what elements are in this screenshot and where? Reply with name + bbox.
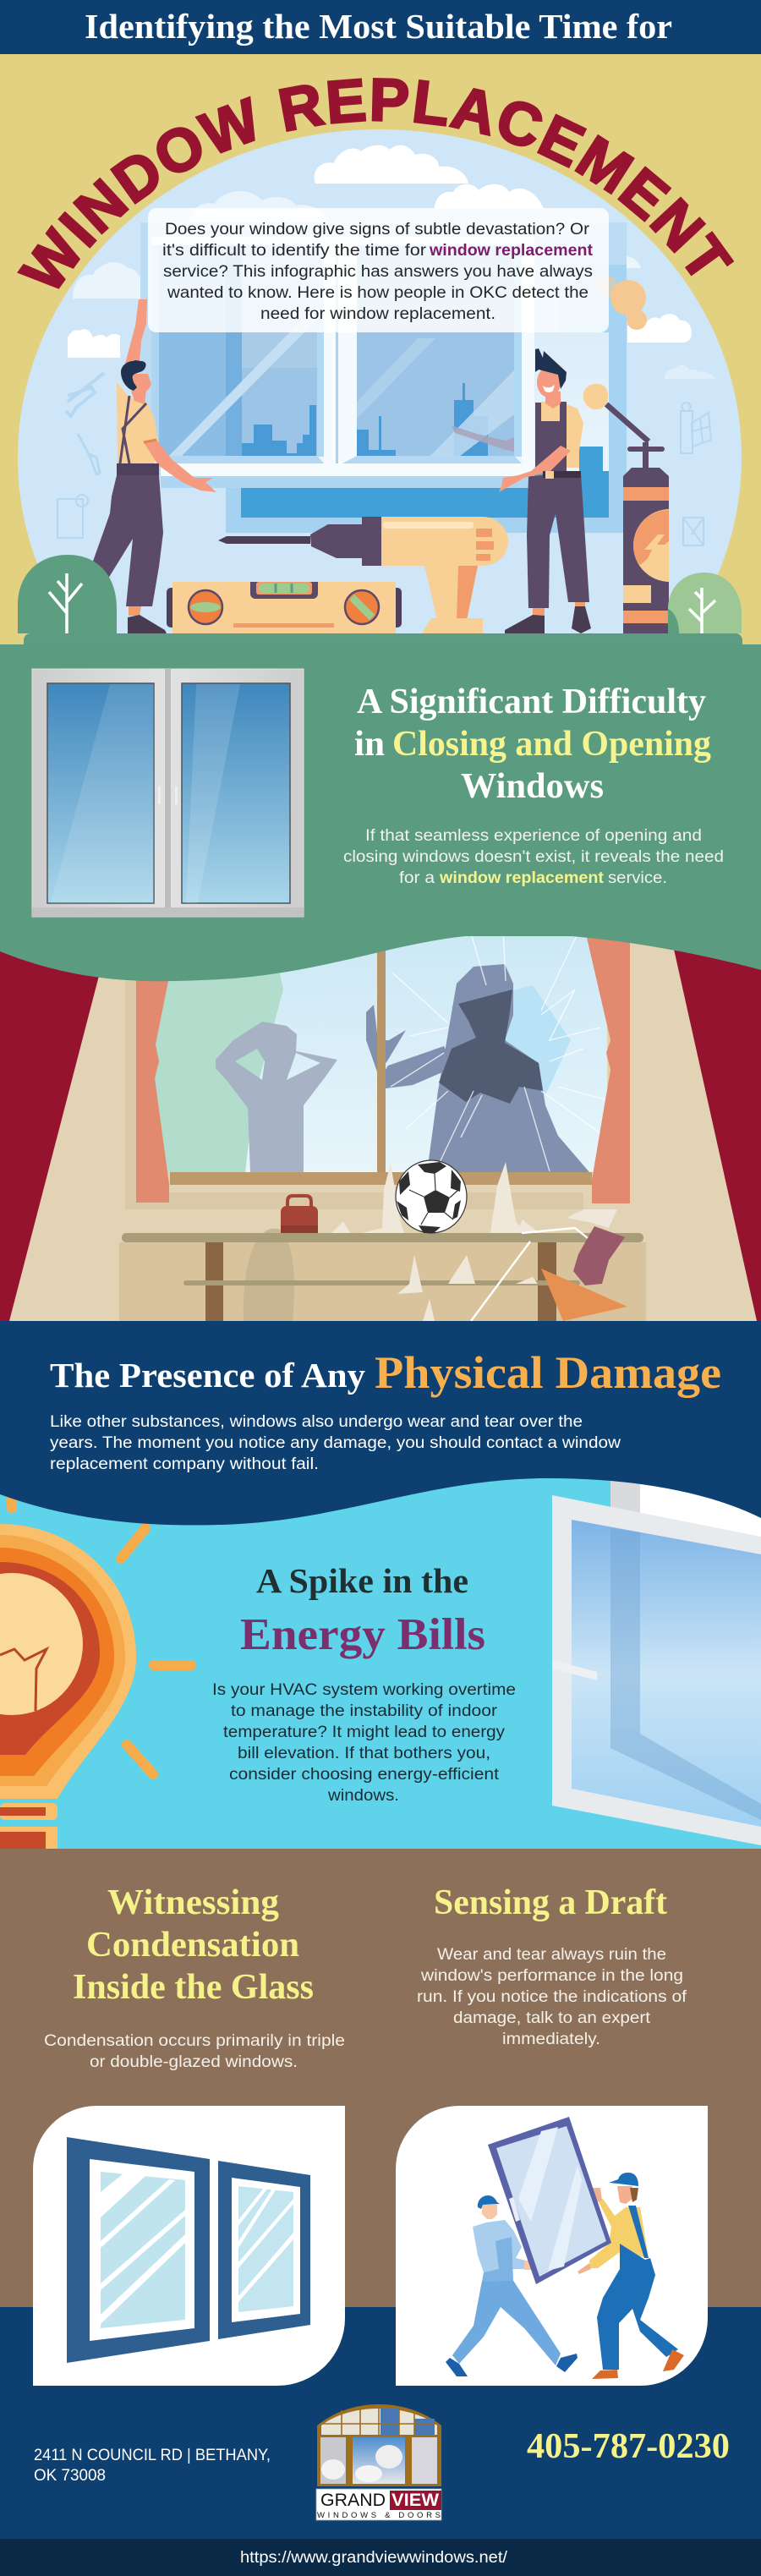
- column: draft: window's performance in the long: [420, 1967, 683, 1985]
- right curtain: [585, 930, 630, 1203]
- footer navy background: [0, 2307, 761, 2539]
- icon: light bulb: [0, 1524, 136, 1849]
- paragraph: [343, 827, 724, 887]
- intro text card: [148, 208, 609, 332]
- heading: [240, 1561, 485, 1659]
- panel: difficulty closing and opening: [0, 644, 761, 936]
- window: [140, 222, 627, 533]
- paragraph: Like other substances, windows also undergo wear and tear over the: [50, 1413, 583, 1431]
- intro paragraph: [162, 221, 594, 323]
- heading: Physical Damage: [375, 1347, 721, 1398]
- arched heading: WINDOW REPLACEMENT: [17, 78, 734, 289]
- intro paragraph: service? This infographic has answers you have always: [163, 263, 593, 281]
- window sill: [170, 1172, 592, 1185]
- intro paragraph: wanted to know. Here is how people in OKC detect the: [167, 284, 589, 302]
- ground strip: [24, 633, 742, 650]
- logo: [316, 2404, 441, 2520]
- heading: Windows: [461, 767, 604, 806]
- footer address: OK 73008: [34, 2467, 106, 2485]
- paragraph: replacement company without fail.: [50, 1455, 319, 1473]
- title line: Identifying the Most Suitable Time for: [85, 7, 672, 46]
- paragraph: [212, 1681, 516, 1805]
- column: condensation: Condensation occurs primarily in triple: [44, 2032, 345, 2050]
- column: condensation: Condensation: [86, 1926, 299, 1965]
- panel: energy bills: [0, 1472, 761, 1849]
- icon: open window: [552, 1472, 761, 1845]
- paragraph: service.: [608, 869, 667, 887]
- intro paragraph: need for window replacement.: [260, 305, 495, 323]
- heading: [50, 1347, 721, 1398]
- column: condensation: [44, 1883, 345, 2071]
- paragraph: to manage the instability of indoor: [231, 1702, 498, 1720]
- worker left: [446, 2195, 578, 2376]
- soccer ball: [396, 1160, 467, 1233]
- footer address: 2411 N COUNCIL RD | BETHANY,: [34, 2447, 271, 2464]
- orange shard: [541, 1269, 627, 1321]
- paragraph: temperature? It might lead to energy: [223, 1724, 506, 1741]
- lower wall: [125, 981, 583, 1209]
- worker right: [578, 2173, 684, 2379]
- column: draft: [417, 1883, 687, 2048]
- column: draft: Wear and tear always ruin the: [437, 1946, 666, 1964]
- paragraph: Is your HVAC system working overtime: [212, 1681, 516, 1699]
- left shrub: [18, 555, 117, 633]
- bulb rays: [12, 1488, 191, 1774]
- glass crack on table: [471, 1228, 592, 1321]
- card: workers carrying glass: [396, 2106, 708, 2386]
- silhouette: person through glass: [366, 964, 589, 1172]
- table: [122, 1233, 643, 1322]
- intro paragraph: it's difficult to identify the time for: [162, 242, 427, 260]
- right worker: [499, 348, 591, 633]
- heading: Closing and Opening: [392, 725, 711, 764]
- wall: [9, 930, 757, 1321]
- green wave top of room: [0, 930, 761, 981]
- icon: silver double window: [32, 669, 304, 917]
- glass shards: [331, 1162, 617, 1321]
- phone number: 405-787-0230: [527, 2427, 730, 2466]
- panel: room with broken window: [0, 930, 761, 1322]
- paragraph: bill elevation. If that bothers you,: [238, 1745, 490, 1762]
- paragraph: If that seamless experience of opening and: [365, 827, 702, 845]
- heading: The Presence of Any: [50, 1356, 366, 1395]
- glass cracks: [391, 930, 605, 1171]
- card: blue windows: [33, 2106, 345, 2386]
- drill: [218, 517, 508, 633]
- sky dome: [18, 129, 742, 633]
- intro paragraph: Does your window give signs of subtle devastation? Or: [165, 221, 590, 238]
- silhouette: distressed person: [216, 1022, 337, 1172]
- right shrub: [668, 573, 742, 633]
- paragraph: consider choosing energy-efficient: [229, 1766, 500, 1784]
- column: draft: run. If you notice the indications of: [417, 1988, 687, 2006]
- outdoor window: [156, 930, 607, 1172]
- intro paragraph: window replacement: [429, 242, 594, 260]
- clouds: [68, 145, 714, 379]
- paragraph: window replacement: [439, 869, 605, 887]
- mug: [281, 1196, 318, 1233]
- paragraph: for a: [399, 869, 435, 887]
- faint tool icons: [57, 373, 711, 545]
- paragraph: windows.: [327, 1787, 399, 1805]
- column: condensation: or double-glazed windows.: [90, 2053, 298, 2071]
- paragraph: closing windows doesn't exist, it reveals the need: [343, 848, 724, 866]
- column: draft: Sensing a Draft: [434, 1883, 667, 1922]
- left worker: [75, 299, 216, 633]
- panel: physical damage: [0, 1321, 761, 1525]
- top title banner: [0, 0, 761, 54]
- caulk can: [583, 276, 669, 633]
- logo: WINDOWS & DOORS: [317, 2511, 441, 2520]
- paragraph: years. The moment you notice any damage, you should contact a window: [50, 1434, 621, 1452]
- left curtain: [136, 977, 169, 1203]
- panel: hero illustration: [0, 54, 761, 644]
- glass pane: [488, 2117, 611, 2284]
- heading: in: [354, 725, 385, 764]
- column: draft: damage, talk to an expert: [453, 2009, 651, 2027]
- paragraph: [50, 1413, 621, 1473]
- website bar: [0, 2539, 761, 2576]
- heading: [354, 682, 711, 806]
- table spill: [244, 1229, 294, 1321]
- fallen bottle: [573, 1226, 625, 1285]
- level tool: [167, 582, 402, 633]
- column: condensation: Witnessing: [107, 1883, 279, 1922]
- panel: condensation and draft: [0, 1849, 761, 2539]
- website bar: https://www.grandviewwindows.net/: [240, 2549, 508, 2567]
- logo: VIEW: [391, 2491, 439, 2510]
- heading: A Significant Difficulty: [357, 682, 706, 721]
- column: draft: immediately.: [502, 2031, 600, 2048]
- footer address: [34, 2447, 271, 2485]
- column: condensation: Inside the Glass: [73, 1968, 314, 2007]
- heading: Energy Bills: [240, 1610, 485, 1659]
- logo: GRAND: [320, 2491, 386, 2510]
- heading: A Spike in the: [256, 1561, 468, 1600]
